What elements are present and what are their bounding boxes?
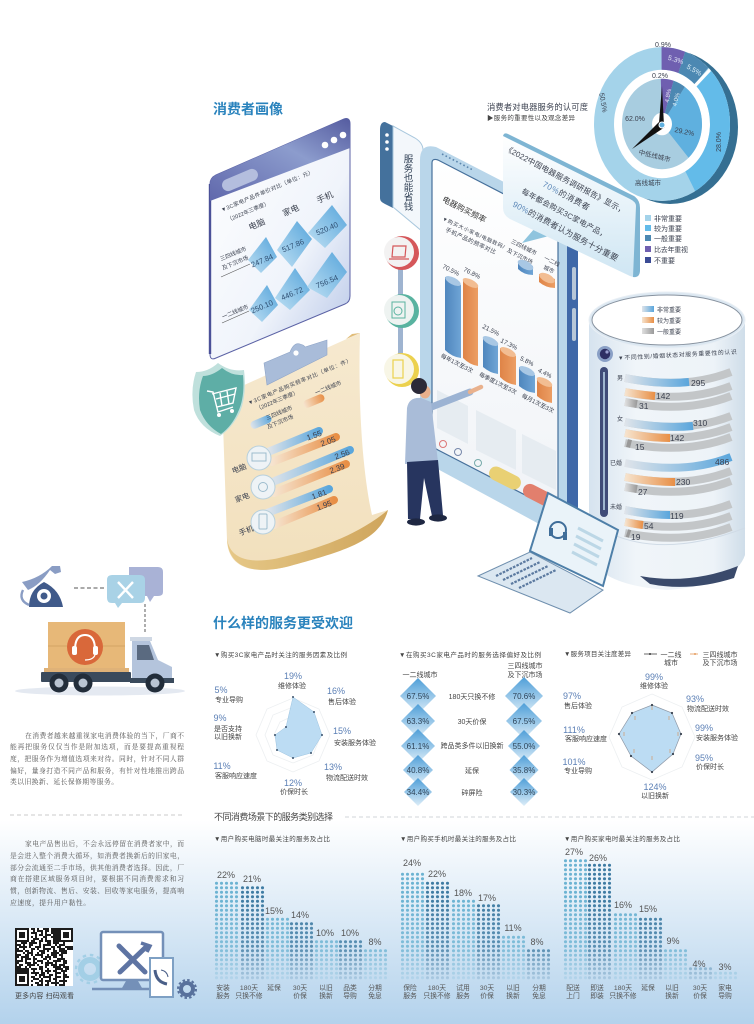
panel: service preference diamonds: 延保: [465, 766, 479, 775]
icon: QR code: [15, 928, 73, 986]
chart: phone purchase dot bars: 24%: [403, 858, 421, 868]
legend: radar cities: 城市: [664, 658, 678, 667]
panel: attention factors radar: 15%: [333, 726, 351, 736]
chart: computer purchase dot bars: 22%: [217, 870, 235, 880]
bar: phone: [237, 488, 334, 537]
chart: service importance donut: 5.3%: [667, 55, 684, 66]
chart: computer purchase dot bars: ▼用户购买电脑时最关注的服务及占比: [214, 834, 330, 843]
panel: service preference diamonds: 一二线城市: [402, 670, 438, 679]
panel: phone with purchase frequency chart: 三四线城市: [510, 237, 539, 257]
panel: gender and marriage cylinder: 女: [617, 415, 623, 423]
panel: attention factors radar: 安装服务体验: [334, 738, 376, 747]
panel: survey speech card: 《2022中国电器服务调研报告》显示，: [503, 143, 628, 216]
chart: computer purchase dot bars: 只换不修: [235, 991, 263, 1000]
panel: attention difference radar: 124%: [643, 782, 667, 792]
tag: service saves money: 服务也能省钱: [402, 154, 413, 211]
chart: phone purchase dot bars: 分期: [532, 983, 546, 992]
panel: phone with purchase frequency chart: 及下沉市场: [506, 246, 535, 266]
panel: gender and marriage cylinder: 31: [639, 401, 649, 411]
panel: gender and marriage cylinder: ▼不同性别/婚姻状态对服务重要性的认识: [618, 348, 737, 362]
panel: attention factors radar: 客服响应速度: [215, 771, 257, 780]
radar area: [274, 696, 323, 759]
chart: service importance donut: 4.8%: [665, 88, 673, 103]
chart: computer purchase dot bars: 21%: [243, 874, 261, 884]
screen cells: [437, 390, 556, 490]
panel: survey speech card: 每年都会购买3C家电产品，: [520, 186, 610, 240]
panel: unit price window: ▼3C家电产品件单价对比（单位：元）: [220, 167, 315, 214]
panel: purchase frequency note paper: [222, 333, 388, 570]
panel: service preference diamonds: 30天价保: [458, 717, 486, 726]
panel: purchase frequency note paper: 一二线城市: [314, 378, 343, 397]
panel: attention difference radar: 价保时长: [696, 762, 724, 771]
cylinder bars: [444, 274, 554, 403]
chart: appliance purchase dot bars: 即装: [590, 991, 604, 1000]
panel: gender and marriage cylinder: 15: [635, 442, 645, 452]
text block: paragraph one: 类以旧换新、延长保修期等服务。: [10, 777, 118, 786]
chart: phone purchase dot bars: 服务: [456, 991, 470, 1000]
bars: married: [625, 457, 731, 492]
panel: survey speech card: [503, 133, 640, 277]
panel: phone with purchase frequency chart: ▼购买大小家电/电脑数码/: [441, 215, 507, 251]
text block: paragraph one: 度，把服务作为增值选项来对待。同时，针对不同人群: [10, 754, 184, 764]
panel: service preference diamonds: ▼在购买3C家电产品时的服务选择偏好及比例: [399, 650, 541, 659]
chart: computer purchase dot bars: 14%: [291, 910, 309, 920]
bar: phone: 1.95: [315, 499, 334, 513]
chart: appliance purchase dot bars: 27%: [565, 847, 583, 857]
chart: appliance purchase dot bars: 家电: [718, 983, 732, 992]
chart: computer purchase dot bars: 8%: [368, 937, 382, 947]
panel: gender and marriage cylinder: 119: [670, 511, 684, 521]
panel: service preference diamonds: 及下沉市场: [508, 670, 542, 679]
panel: unit price window: 一二线城市: [221, 302, 250, 321]
chart: appliance purchase dot bars: 3%: [718, 962, 732, 972]
chart: appliance purchase dot bars: 26%: [589, 853, 607, 863]
bar: phone: 手机: [237, 523, 255, 537]
chart: computer purchase dot bars: 换新: [319, 991, 333, 1000]
chart: phone purchase dot bars: 22%: [428, 869, 446, 879]
bar: appliance: 2.56: [333, 448, 352, 462]
panel: attention factors radar: 13%: [324, 762, 342, 772]
chart: computer purchase dot bars: 15%: [265, 906, 283, 916]
panel: phone with purchase frequency chart: 一二线: [543, 254, 562, 269]
legend: donut: 一般重要: [654, 234, 682, 243]
panel: attention difference radar: 95%: [695, 753, 713, 763]
panel: attention difference radar: 专业导购: [564, 766, 592, 775]
chart: phone purchase dot bars: 价保: [480, 991, 494, 1000]
panel: service preference diamonds: 三四线城市: [508, 661, 542, 670]
chart: phone purchase dot bars: 180天: [428, 984, 446, 992]
panel: phone with purchase frequency chart: 每月1次至3次: [520, 392, 556, 415]
icon: shopping shield: [192, 363, 245, 436]
text block: paragraph one: 在消费者越来越重视家电消费体验的当下，厂商不: [25, 731, 184, 741]
chart: service importance donut: 4.0%: [672, 92, 682, 107]
chart: appliance purchase dot bars: 180天: [614, 984, 632, 992]
panel: service preference diamonds: 碎屏险: [462, 788, 482, 797]
panel: unit price window: 247.84: [250, 252, 274, 269]
panel: gender and marriage cylinder: 已婚: [610, 459, 622, 467]
chart: computer purchase dot bars: 10%: [316, 928, 334, 938]
panel: unit price window: （2022年三季度）: [226, 199, 270, 224]
panel: service preference diamonds: 34.4%: [407, 788, 429, 797]
panel: service preference diamonds: [399, 650, 543, 806]
bars: female: [625, 416, 731, 448]
text block: paragraph one: 偏好，量身打造不同产品和服务，有针对性地推出跨品: [10, 766, 184, 776]
panel: gender and marriage cylinder: 142: [656, 391, 670, 401]
panel: gender and marriage cylinder: 54: [644, 521, 654, 531]
panel: unit price window: [210, 119, 350, 359]
chart: appliance purchase dot bars: 9%: [666, 936, 680, 946]
panel: purchase frequency note paper: 及下沉市场: [266, 412, 295, 431]
chart: appliance purchase dot bars: 导购: [718, 991, 732, 1000]
chart: computer purchase dot bars: 价保: [293, 991, 307, 1000]
chart: phone purchase dot bars: 试用: [456, 983, 470, 992]
panel: attention difference radar: 维修体验: [640, 681, 668, 690]
panel: attention factors radar: 12%: [284, 778, 302, 788]
chart: phone purchase dot bars: 18%: [454, 888, 472, 898]
chart: computer purchase dot bars: 品类: [343, 983, 357, 992]
legend: cylinder: 非常重要: [657, 306, 681, 314]
panel: attention difference radar: 安装服务体验: [696, 733, 738, 742]
legend: donut: 不重要: [654, 257, 675, 265]
chart: appliance purchase dot bars: 4%: [692, 959, 706, 969]
panel: unit price window: 250.10: [250, 298, 274, 315]
panel: phone with purchase frequency chart: 70.5%: [441, 263, 461, 278]
chart: computer purchase dot bars: [214, 834, 388, 1000]
panel: phone with purchase frequency chart: 城市: [542, 263, 556, 276]
panel: attention difference radar: 售后体验: [564, 701, 592, 710]
heading: consumer recognition: [487, 102, 588, 122]
panel: service preference diamonds: 67.5%: [407, 692, 429, 701]
panel: gender and marriage cylinder: 310: [693, 418, 707, 428]
chart: computer purchase dot bars: 安装: [216, 983, 230, 992]
panel: attention factors radar: 5%: [214, 685, 228, 695]
chart: computer purchase dot bars: 180天: [240, 984, 258, 992]
text block: paragraph one: [10, 731, 184, 786]
panel: attention difference radar: 111%: [563, 725, 585, 735]
panel: unit price window: 及下沉市场: [221, 253, 250, 272]
panel: attention difference radar: ▼服务项目关注度差异: [564, 649, 632, 658]
chart: appliance purchase dot bars: 价保: [693, 991, 707, 1000]
panel: attention difference radar: 101%: [562, 757, 586, 767]
chart: phone purchase dot bars: ▼用户购买手机时最关注的服务及占比: [400, 834, 516, 843]
panel: attention factors radar: 维修体验: [278, 681, 306, 690]
chart: appliance purchase dot bars: 即送: [590, 983, 604, 992]
panel: phone with purchase frequency chart: 5.8%: [519, 355, 535, 368]
panel: attention factors radar: 11%: [213, 761, 231, 771]
panel: purchase frequency note paper: （2022年三季度）: [255, 388, 299, 413]
panel: phone with purchase frequency chart: 每季度1次至3次: [478, 370, 518, 396]
chart: service importance donut: 0.9%: [655, 42, 671, 49]
chart: service importance donut: 28.0%: [716, 132, 723, 152]
panel: service preference diamonds: 55.0%: [513, 742, 535, 751]
icon: monitor with tools and phone: [76, 932, 196, 998]
legend: donut: 较为重要: [654, 224, 682, 233]
bar: phone: 1.81: [310, 488, 329, 502]
panel: unit price window: 三四线城市: [219, 244, 248, 263]
panel: attention factors radar: 物流配送时效: [326, 773, 368, 782]
panel: attention difference radar: 99%: [695, 723, 713, 733]
bar: appliance: 家电: [233, 490, 251, 504]
text block: paragraph two: 惯，创新物流、售后、安装、回收等家电服务，提高响: [10, 886, 184, 896]
legend: radar cities: [644, 650, 738, 667]
panel: gender and marriage cylinder: 486: [715, 457, 729, 467]
chart: computer purchase dot bars: 分期: [368, 983, 382, 992]
heading: consumer recognition: ▶服务的重要性以及观念差异: [487, 113, 576, 122]
panel: gender and marriage cylinder: 295: [691, 378, 705, 388]
panel: attention factors radar: 是否支持: [214, 724, 242, 733]
panel: unit price window: 756.54: [315, 273, 339, 290]
screen icons and pills: [440, 440, 555, 509]
chart: appliance purchase dot bars: [563, 834, 738, 1000]
panel: gender and marriage cylinder: 男: [617, 375, 623, 382]
chart: appliance purchase dot bars: 以旧: [665, 984, 679, 992]
panel: attention difference radar: [562, 649, 738, 800]
chart: service importance donut: 0.2%: [652, 73, 668, 80]
panel: purchase frequency note paper: 三四线城市: [265, 403, 294, 422]
panel: survey speech card: 70%的消费者: [541, 179, 592, 212]
panel: attention difference radar: 物流配送时效: [687, 704, 729, 713]
bars: male: [625, 372, 731, 407]
tag: service saves money: [380, 122, 423, 232]
panel: unit price window: 手机: [315, 189, 335, 205]
panel: attention factors radar: 19%: [284, 671, 302, 681]
bar: computer: [230, 429, 338, 475]
panel: phone with purchase frequency chart: 手机产品的频率对比: [444, 226, 498, 256]
text block: paragraph one: 能再把服务仅仅当作是附加选项，而是要提高重视程: [10, 742, 184, 752]
panel: attention difference radar: 客服响应速度: [565, 734, 607, 743]
panel: unit price window: 446.72: [280, 285, 304, 302]
panel: attention factors radar: 16%: [327, 686, 345, 696]
chart: appliance purchase dot bars: ▼用户购买家电时最关注的服务及占比: [564, 834, 680, 843]
text block: paragraph two: 部分会流通至二手市场，供其他消费者选择。因此，厂: [10, 863, 184, 873]
legend: radar cities: 一二线: [660, 650, 682, 659]
panel: gender and marriage cylinder: 27: [638, 487, 648, 497]
legend: donut: [645, 214, 688, 265]
text block: paragraph two: 应速度，提升用户黏性。: [10, 898, 90, 908]
heading: consumer recognition: 消费者对电器服务的认可度: [487, 102, 588, 112]
panel: service preference diamonds: 70.6%: [513, 692, 535, 701]
panel: attention factors radar: 售后体验: [328, 697, 356, 706]
chart: computer purchase dot bars: 10%: [341, 928, 359, 938]
chart: phone purchase dot bars: 17%: [478, 893, 496, 903]
bar: computer: 1.55: [305, 429, 324, 443]
chart: service importance donut: 高线城市: [635, 178, 662, 187]
panel: attention difference radar: 97%: [563, 691, 581, 701]
title: consumer portrait: 消费者画像: [213, 101, 283, 117]
panel: attention factors radar: ▼购买3C家电产品时关注的服务因素及比例: [214, 650, 347, 659]
chart: computer purchase dot bars: 延保: [267, 983, 281, 992]
panel: attention factors radar: 价保时长: [280, 787, 308, 796]
icons: appliance circles: [384, 236, 419, 387]
panel: attention difference radar: 99%: [645, 672, 663, 682]
icon: paper clip: [264, 340, 327, 385]
chart: phone purchase dot bars: 30天: [480, 984, 494, 992]
chart: appliance purchase dot bars: 换新: [665, 991, 679, 1000]
panel: gender and marriage cylinder: [589, 292, 745, 590]
chart: phone purchase dot bars: 保险: [403, 983, 417, 992]
chart: phone purchase dot bars: 8%: [530, 937, 544, 947]
chart: appliance purchase dot bars: 上门: [566, 991, 580, 1000]
legend: cylinder: 一般重要: [657, 328, 681, 336]
panel: purchase frequency note paper: ▼3C家电产品购买频率对比（单位：件）: [247, 356, 353, 407]
panel: unit price window: 520.40: [315, 220, 339, 237]
panel: phone with purchase frequency chart: 4.4%: [537, 367, 553, 380]
panel: attention factors radar: 以旧换新: [214, 732, 242, 741]
chart: appliance purchase dot bars: 配送: [566, 983, 580, 992]
caption: scan for more: 更多内容 扫码观看: [15, 991, 74, 1000]
text block: paragraph two: [10, 839, 184, 908]
chart: computer purchase dot bars: 导购: [343, 991, 357, 1000]
chart: computer purchase dot bars: 服务: [216, 991, 230, 1000]
text block: paragraph two: 是会进入整个消费大循环，如消费者换新后的旧家电，: [10, 851, 184, 861]
panel: attention factors radar: 9%: [213, 713, 227, 723]
panel: unit price window: 517.86: [281, 237, 305, 254]
panel: service preference diamonds: 180天只换不修: [449, 692, 495, 701]
icon: person pointing at phone: [405, 378, 481, 526]
panel: phone with purchase frequency chart: 76.8%: [462, 266, 482, 281]
chart: service importance donut: 29.2%: [674, 127, 695, 138]
text block: paragraph two: 家电产品售出后，不会永远停留在消费者家中，而: [25, 839, 184, 849]
legend: cylinder: 较为重要: [657, 317, 681, 325]
icon: speech bubbles tools: [107, 567, 163, 608]
chart: phone purchase dot bars: 免息: [532, 991, 546, 1000]
panel: gender and marriage cylinder: 142: [670, 433, 684, 443]
panel: survey speech card: 90%的消费者认为服务十分重要: [511, 199, 620, 263]
legend: radar cities: 及下沉市场: [702, 658, 738, 667]
chart: service importance donut: 50.5%: [597, 92, 608, 113]
legend: radar cities: 三四线城市: [702, 650, 738, 659]
legend: donut: 非常重要: [654, 214, 682, 223]
panel: phone with purchase frequency chart: 21.5%: [481, 323, 501, 338]
bar: appliance: 2.39: [328, 462, 347, 476]
chart: phone purchase dot bars: 以旧: [506, 984, 520, 992]
heading: scenario services: 不同消费场景下的服务类别选择: [214, 811, 333, 822]
panel: gender and marriage cylinder: 19: [631, 532, 641, 542]
chart: appliance purchase dot bars: 30天: [693, 984, 707, 992]
chart: service importance donut: 中低线城市: [638, 147, 672, 164]
panel: attention difference radar: 以旧换新: [641, 791, 669, 800]
panel: phone with purchase frequency chart: [420, 146, 578, 540]
radar area: [618, 704, 682, 773]
chart: service importance donut: 62.0%: [625, 116, 645, 123]
panel: service preference diamonds: 跨品类多件以旧换新: [440, 741, 504, 750]
chart: service importance donut: [594, 42, 738, 204]
chart: computer purchase dot bars: 以旧: [319, 984, 333, 992]
panel: attention factors radar: 专业导购: [215, 695, 243, 704]
chart: computer purchase dot bars: 30天: [293, 984, 307, 992]
chart: computer purchase dot bars: 免息: [368, 991, 382, 1000]
chart: phone purchase dot bars: 换新: [506, 991, 520, 1000]
title: which services are popular: 什么样的服务更受欢迎: [213, 615, 353, 631]
text block: paragraph two: 商在搭建区域服务项目时，要根据不同消费需求和习: [10, 874, 184, 884]
icon: laptop: [478, 493, 618, 613]
icon: telephone: [21, 566, 63, 607]
panel: phone with purchase frequency chart: 每年1次至3次: [439, 352, 475, 375]
chart: appliance purchase dot bars: 延保: [641, 983, 655, 992]
panel: service preference diamonds: 61.1%: [407, 742, 429, 751]
panel: unit price window: 家电: [281, 202, 301, 218]
chart: appliance purchase dot bars: 只换不修: [609, 991, 637, 1000]
chart: appliance purchase dot bars: 16%: [614, 900, 632, 910]
illustration: service truck: [15, 566, 185, 696]
panel: unit price window: 电脑: [247, 216, 267, 232]
bar: appliance: [233, 448, 352, 504]
legend: donut: 比去年重视: [654, 245, 688, 254]
panel: service preference diamonds: 63.3%: [407, 717, 429, 726]
legend: cylinder: [642, 306, 681, 336]
bar: computer: 2.05: [319, 435, 338, 449]
chart: phone purchase dot bars: 只换不修: [423, 991, 451, 1000]
chart: service importance donut: 5.5%: [685, 64, 702, 78]
panel: attention difference radar: 93%: [686, 694, 704, 704]
chart: phone purchase dot bars: 11%: [504, 923, 522, 933]
panel: phone with purchase frequency chart: 17.3%: [499, 337, 519, 352]
bars: single: [625, 504, 731, 538]
panel: service preference diamonds: 40.8%: [407, 766, 429, 775]
panel: attention factors radar: [213, 650, 376, 796]
panel: service preference diamonds: 67.5%: [513, 717, 535, 726]
panel: service preference diamonds: 35.8%: [513, 766, 535, 775]
panel: phone with purchase frequency chart: 电器购买频率: [441, 194, 488, 225]
chart: phone purchase dot bars: [400, 834, 551, 1000]
bar: computer: 电脑: [230, 461, 248, 475]
chart: appliance purchase dot bars: 15%: [639, 904, 657, 914]
panel: gender and marriage cylinder: 未婚: [610, 503, 622, 511]
panel: gender and marriage cylinder: 230: [676, 477, 690, 487]
chart: phone purchase dot bars: 服务: [403, 991, 417, 1000]
panel: service preference diamonds: 30.3%: [513, 788, 535, 797]
